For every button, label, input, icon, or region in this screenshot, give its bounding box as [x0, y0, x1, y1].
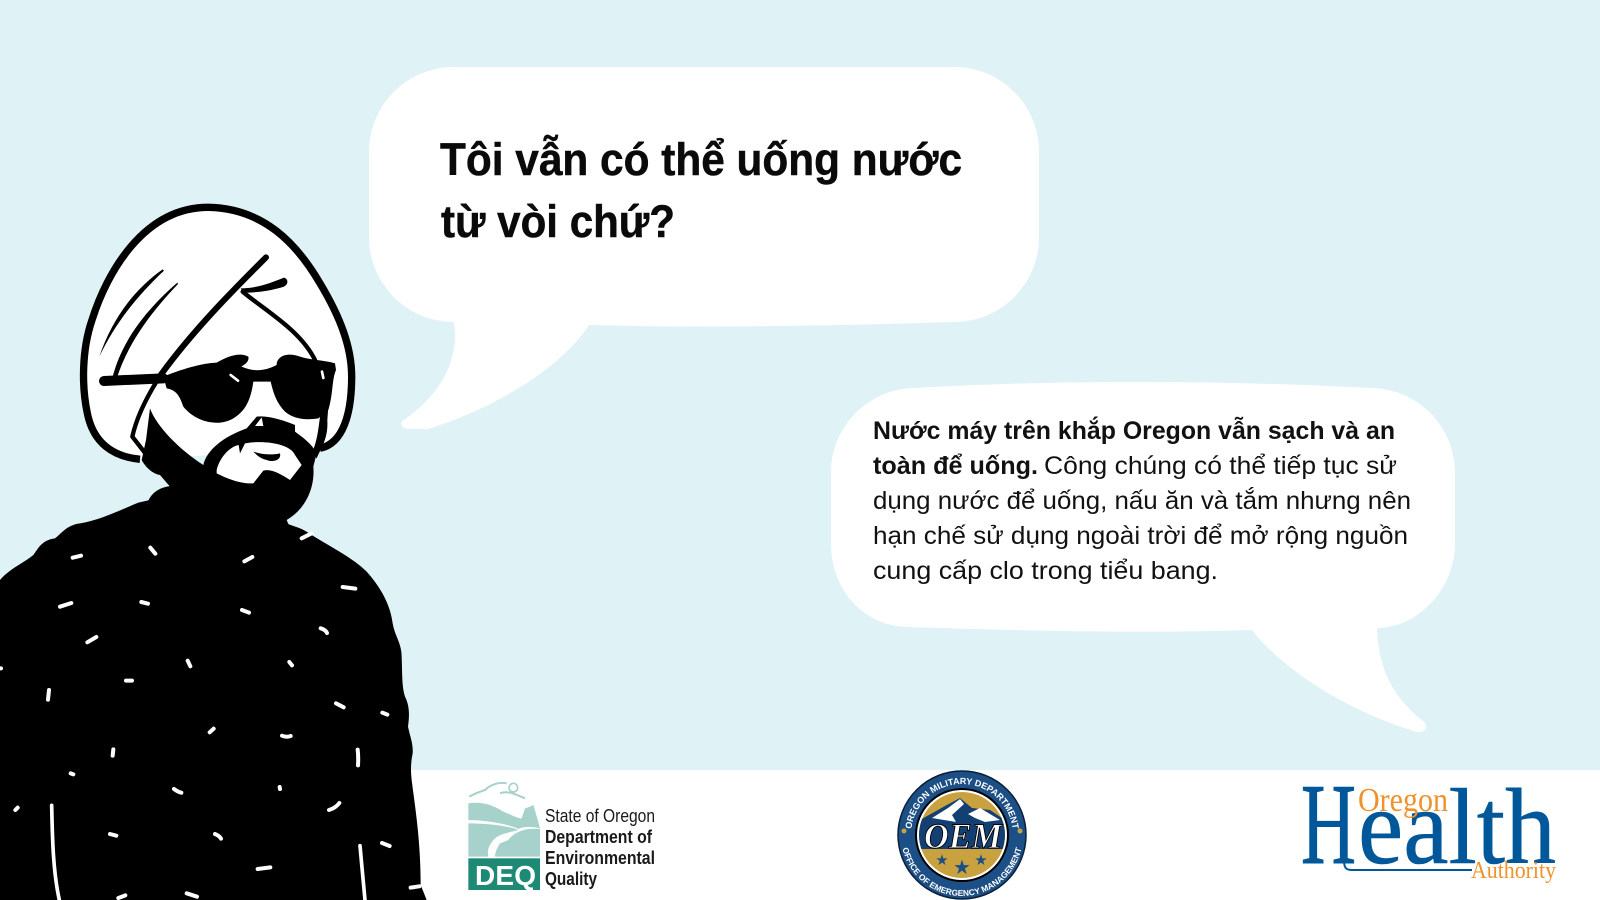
sweater body [0, 500, 427, 900]
beard [142, 408, 317, 520]
DEQ wordmark: Quality [545, 869, 597, 889]
head with turban [84, 207, 352, 520]
DEQ landscape mark [468, 783, 540, 891]
speech bubble: question [369, 67, 1039, 429]
turban folds [104, 257, 315, 455]
question heading: Tôi vẫn có thể uống nước [440, 134, 962, 185]
DEQ wordmark: State of Oregon [545, 806, 655, 826]
answer text: toàn để uống. [873, 452, 1038, 480]
answer text: Công chúng có thể tiếp tục sử [1044, 452, 1397, 480]
mouth patch [217, 442, 302, 483]
logo: Oregon Health Authority: Authority [1471, 858, 1556, 884]
logo: Oregon OEM seal: ★ [953, 857, 971, 879]
logo: Oregon DEQ [468, 783, 655, 891]
seal ring text: OREGON MILITARY DEPARTMENT [906, 778, 1019, 828]
question heading: từ vòi chứ? [441, 196, 675, 247]
logo: Oregon Health Authority: Oregon [1358, 782, 1448, 819]
logo: Oregon Health Authority: ealth [1358, 768, 1556, 887]
DEQ wordmark [545, 806, 655, 889]
seal ring text [903, 778, 1022, 896]
white footer band [0, 770, 1600, 900]
speech bubble: answer [831, 382, 1455, 732]
answer text: cung cấp clo trong tiểu bang. [873, 557, 1218, 585]
DEQ wordmark: Department of [545, 827, 653, 847]
logo: Oregon OEM seal [897, 770, 1027, 900]
logo: Oregon OEM seal: ★ [974, 852, 988, 869]
logo: Oregon OEM seal: OEM [924, 816, 1004, 856]
answer text: dụng nước để uống, nấu ăn và tắm nhưng nên [873, 486, 1411, 515]
DEQ landscape mark: DEQ [475, 860, 536, 891]
DEQ wordmark: Environmental [545, 848, 655, 868]
logo: Oregon Health Authority: H [1301, 761, 1356, 888]
logo: Oregon OEM seal: ★ [935, 852, 949, 869]
seal mountain and stars [915, 798, 1009, 849]
seal ring text: OFFICE OF EMERGENCY MANAGEMENT [903, 846, 1022, 896]
logo: Oregon Health Authority [1301, 761, 1556, 888]
answer text: Nước máy trên khắp Oregon vẫn sạch và an [873, 415, 1395, 445]
sunglasses [163, 355, 336, 423]
answer text: hạn chế sử dụng ngoài trời để mở rộng nguồn [873, 522, 1408, 550]
question heading [440, 134, 962, 247]
illustration: man in turban and sunglasses [0, 207, 427, 900]
answer text [873, 415, 1411, 585]
